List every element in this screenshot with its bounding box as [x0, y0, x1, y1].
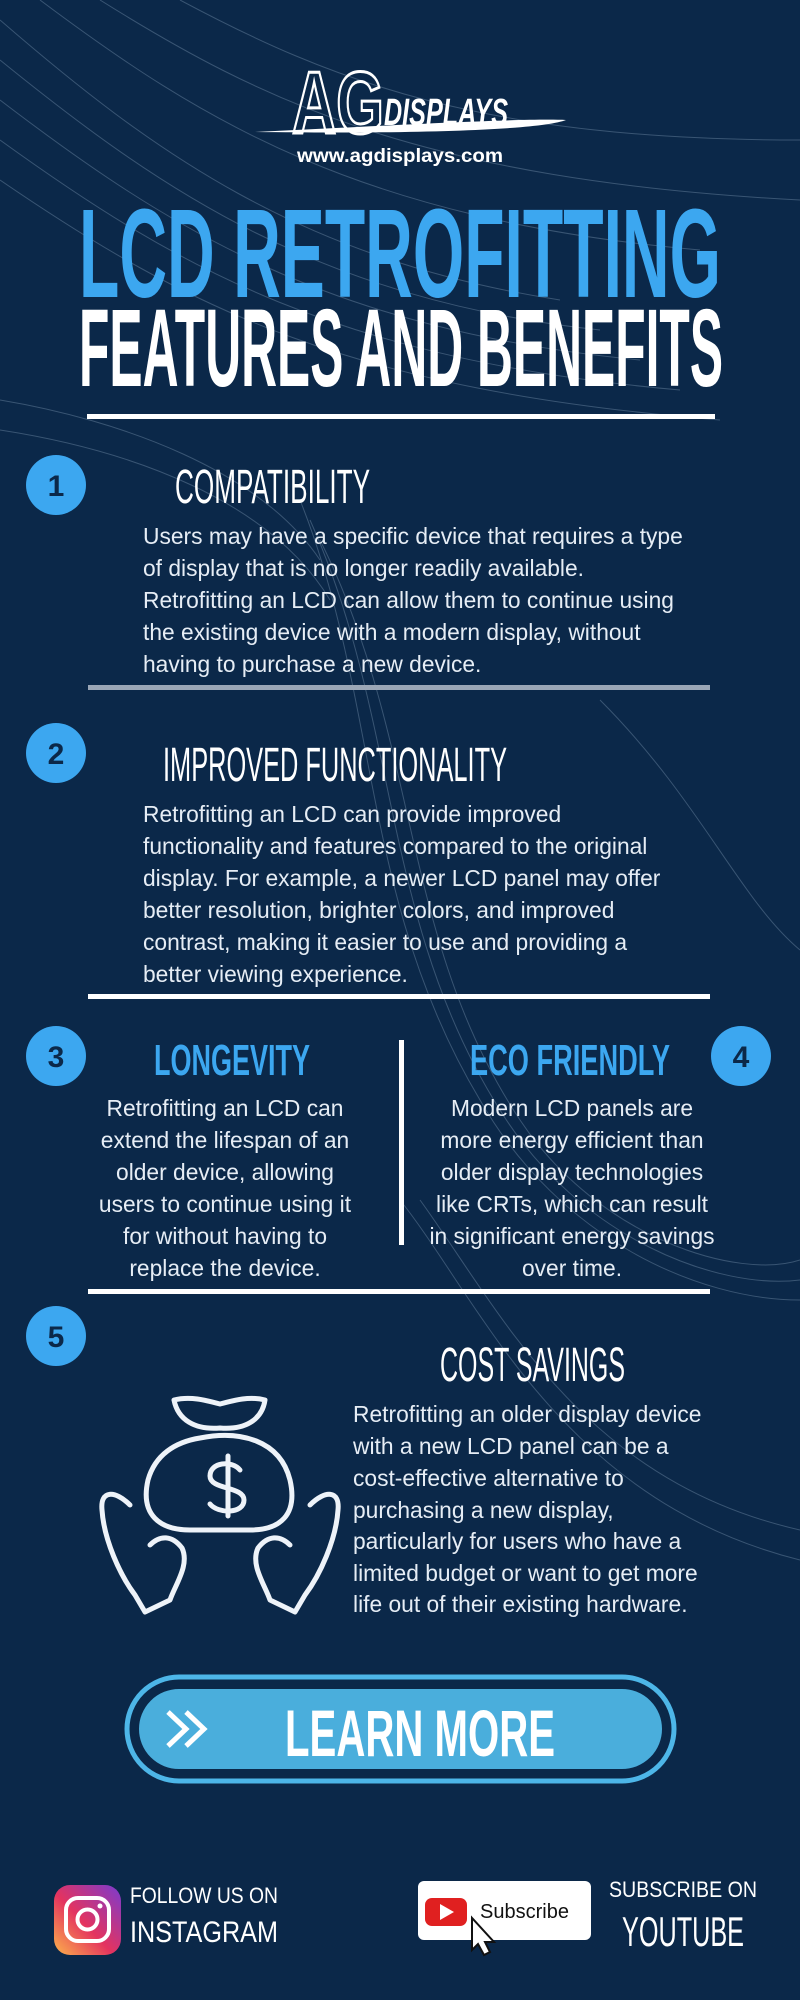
icon: number 4: 4	[733, 1041, 750, 1074]
logo	[255, 53, 566, 167]
icon: number 5	[26, 1306, 86, 1366]
text: cost body: Retrofitting an older display device	[353, 1401, 701, 1427]
text: longevity body: older device, allowing	[116, 1159, 334, 1185]
background waves	[0, 0, 800, 1560]
text: eco body: over time.	[522, 1255, 622, 1281]
instagram: INSTAGRAM	[130, 1916, 278, 1949]
instagram: FOLLOW US ON	[130, 1883, 278, 1908]
logo: AG	[292, 53, 384, 152]
text: functionality body: better viewing experience.	[143, 961, 408, 987]
icon: subscribe button	[418, 1881, 591, 1955]
text: eco body: more energy efficient than	[440, 1127, 704, 1153]
icon: money bag in hands	[102, 1398, 338, 1612]
heading: compatibility: COMPATIBILITY	[175, 461, 370, 514]
text: eco body: like CRTs, which can result	[436, 1191, 709, 1217]
text: longevity body: for without having to	[123, 1223, 327, 1249]
text: functionality body	[143, 801, 661, 987]
text: functionality body: functionality and features compared to the original	[143, 833, 647, 859]
button: learn more	[127, 1677, 674, 1781]
instagram	[54, 1883, 278, 1955]
heading: improved functionality: IMPROVED FUNCTIONALITY	[163, 739, 507, 792]
text: functionality body: Retrofitting an LCD can provide improved	[143, 801, 561, 827]
text: compatibility body: having to purchase a new device.	[143, 651, 481, 677]
text: eco body: in significant energy savings	[429, 1223, 715, 1249]
icon: number 2: 2	[48, 738, 64, 771]
icon: number 1	[26, 455, 86, 515]
text: functionality body: better resolution, brighter colors, and improved	[143, 897, 614, 923]
text: cost body: life out of their existing hardware.	[353, 1591, 688, 1617]
text: cost body: particularly for users who have a	[353, 1528, 681, 1554]
text: longevity body	[99, 1095, 352, 1281]
text: cost body	[352, 1401, 701, 1617]
heading: eco friendly: ECO FRIENDLY	[470, 1036, 670, 1085]
text: compatibility body: Users may have a specific device that requires a type	[143, 523, 683, 549]
text: eco body: Modern LCD panels are	[451, 1095, 693, 1121]
section 4: eco friendly	[429, 1026, 771, 1281]
icon: chevrons	[168, 1712, 204, 1746]
heading: longevity: LONGEVITY	[154, 1036, 310, 1085]
icon: number 2	[26, 723, 86, 783]
text: cost body: limited budget or want to get more	[353, 1560, 698, 1586]
text: eco body: older display technologies	[441, 1159, 703, 1185]
icon: number 1: 1	[48, 470, 64, 503]
button: learn more: LEARN MORE	[285, 1696, 555, 1770]
text: compatibility body: of display that is no longer readily available.	[143, 555, 584, 581]
icon: number 5: 5	[48, 1321, 64, 1354]
section 1: compatibility	[26, 455, 683, 677]
text: compatibility body	[143, 523, 683, 677]
text: functionality body: display. For example, a newer LCD panel may offer	[143, 865, 661, 891]
text: compatibility body: the existing device with a modern display, without	[143, 619, 641, 645]
section 3: longevity	[26, 1026, 352, 1281]
text: longevity body: users to continue using it	[99, 1191, 352, 1217]
text: compatibility body: Retrofitting an LCD can allow them to continue using	[143, 587, 674, 613]
text: longevity body: Retrofitting an LCD can	[107, 1095, 343, 1121]
text: longevity body: extend the lifespan of an	[101, 1127, 349, 1153]
text: cost body: cost-effective alternative to	[353, 1465, 624, 1491]
logo: DISPLAYS	[384, 92, 508, 134]
icon: number 4	[711, 1026, 771, 1086]
title	[79, 183, 723, 410]
text: functionality body: contrast, making it easier to use and providing a	[143, 929, 627, 955]
icon: subscribe button: Subscribe	[480, 1901, 569, 1923]
text: cost body: purchasing a new display,	[353, 1497, 614, 1523]
logo: www.agdisplays.com	[296, 146, 503, 167]
section 2: improved functionality	[26, 723, 661, 987]
youtube: SUBSCRIBE ON	[609, 1877, 757, 1902]
icon: number 3: 3	[48, 1041, 64, 1074]
text: cost body: with a new LCD panel can be a	[352, 1433, 669, 1459]
text: eco body	[429, 1095, 715, 1281]
youtube	[418, 1877, 757, 1955]
section 5: cost savings	[26, 1306, 701, 1617]
text: longevity body: replace the device.	[129, 1255, 321, 1281]
icon: instagram	[54, 1885, 121, 1955]
icon: number 3	[26, 1026, 86, 1086]
heading: cost savings: COST SAVINGS	[440, 1339, 625, 1392]
